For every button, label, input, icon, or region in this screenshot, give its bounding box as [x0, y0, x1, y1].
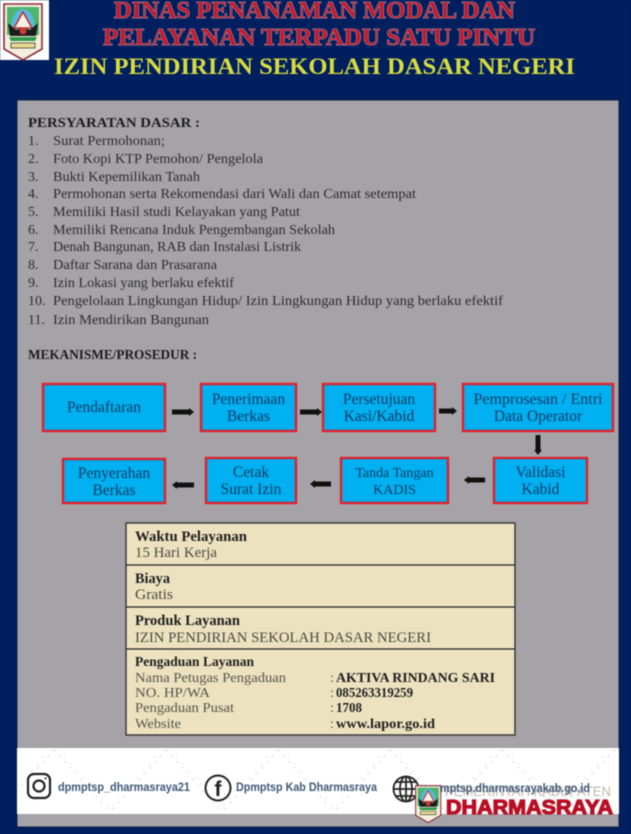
row: pengaduan layanan: Nama Petugas Pengaduan — [135, 671, 286, 686]
row: pengaduan layanan: AKTIVA RINDANG SARI — [336, 670, 495, 685]
row: pengaduan layanan: : — [330, 701, 334, 716]
row: produk layanan: IZIN PENDIRIAN SEKOLAH DASAR NEGERI — [135, 630, 431, 646]
flowchart — [43, 384, 613, 503]
step: tanda tangan: KADIS — [373, 483, 416, 498]
heading: persyaratan dasar: PERSYARATAN DASAR : — [28, 116, 200, 131]
step: tanda tangan: Tanda Tangan — [355, 466, 434, 481]
icon: globe — [394, 776, 418, 802]
row: pengaduan layanan: Website — [135, 717, 181, 732]
requirements list: Izin Lokasi yang berlaku efektif — [53, 276, 234, 291]
row: pengaduan layanan: Pengaduan Layanan — [135, 654, 254, 669]
icon: facebook: f — [214, 778, 222, 801]
row: pengaduan layanan — [135, 654, 495, 732]
requirements list: Pengelolaan Lingkungan Hidup/ Izin Lingkungan Hidup yang berlaku efektif — [53, 294, 503, 309]
info table — [126, 523, 515, 735]
footer band — [17, 748, 619, 823]
title — [54, 0, 575, 79]
step: penerimaan berkas: Berkas — [227, 408, 270, 425]
requirements list: Bukti Kepemilikan Tanah — [53, 170, 200, 185]
arrow — [439, 407, 457, 415]
requirements list: 3. — [28, 170, 38, 185]
step: penyerahan berkas — [63, 459, 165, 503]
step: validasi — [494, 458, 587, 503]
step: pendaftaran: Pendaftaran — [67, 399, 141, 416]
step: pemprosesan: Data Operator — [494, 408, 583, 425]
row: waktu pelayanan — [135, 529, 248, 561]
arrow — [300, 408, 322, 416]
requirements list: 10. — [28, 294, 46, 309]
title: IZIN PENDIRIAN SEKOLAH DASAR NEGERI — [54, 54, 575, 79]
row: waktu pelayanan: Waktu Pelayanan — [135, 529, 248, 545]
requirements list: 5. — [28, 205, 38, 220]
requirements list: 4. — [28, 187, 38, 202]
requirements list: Surat Permohonan; — [53, 134, 165, 149]
step: persetujuan — [323, 384, 435, 431]
step: penerimaan berkas — [201, 384, 296, 431]
row: pengaduan layanan: 1708 — [336, 700, 362, 715]
step: validasi: Validasi — [516, 464, 566, 481]
arrow — [172, 408, 194, 416]
requirements list: 9. — [28, 276, 38, 291]
step: pemprosesan: Pemprosesan / Entri — [474, 391, 603, 408]
requirements list: Foto Kopi KTP Pemohon/ Pengelola — [53, 152, 264, 167]
step: validasi: Kabid — [522, 481, 560, 498]
requirements list: Daftar Sarana dan Prasarana — [53, 258, 218, 273]
requirements list: 8. — [28, 258, 38, 273]
row: waktu pelayanan: 15 Hari Kerja — [135, 545, 217, 561]
dharmasraya wordmark: DHARMASRAYA — [446, 796, 613, 819]
arrow — [172, 481, 194, 489]
row: biaya: Gratis — [135, 587, 173, 603]
title: PELAYANAN TERPADU SATU PINTU — [103, 25, 535, 51]
row: pengaduan layanan: NO. HP/WA — [135, 686, 211, 701]
step: tanda tangan — [341, 458, 448, 503]
logo: regency crest — [0, 0, 49, 60]
requirements list: Permohonan serta Rekomendasi dari Wali dan Camat setempat — [53, 187, 416, 202]
requirements list: 11. — [28, 313, 45, 328]
government wordmark: PEMERINTAH KABUPATEN — [445, 784, 611, 799]
row: pengaduan layanan: : — [330, 717, 334, 732]
row: produk layanan — [135, 613, 431, 646]
instagram handle: dpmptsp_dharmasraya21 — [58, 780, 190, 794]
icon: facebook — [206, 776, 230, 801]
step: cetak surat izin: Cetak — [233, 464, 269, 481]
requirements list: 6. — [28, 223, 38, 238]
arrow — [464, 476, 485, 484]
row: pengaduan layanan: www.lapor.go.id — [336, 716, 436, 731]
heading: mekanisme prosedur: MEKANISME/PROSEDUR : — [28, 348, 197, 363]
requirements list: 7. — [28, 240, 38, 255]
step: persetujuan: Persetujuan — [343, 391, 415, 408]
requirements list: Izin Mendirikan Bangunan — [53, 313, 209, 328]
requirements list: Memiliki Hasil studi Kelayakan yang Patut — [53, 205, 300, 220]
row: pengaduan layanan: : — [330, 686, 334, 701]
requirements list: 1. — [28, 134, 38, 149]
requirements list: Denah Bangunan, RAB dan Instalasi Listrik — [53, 240, 301, 255]
step: persetujuan: Kasi/Kabid — [344, 408, 415, 425]
step: pendaftaran — [43, 384, 165, 431]
requirements list: 2. — [28, 152, 38, 167]
arrow — [310, 480, 331, 488]
step: penyerahan berkas: Berkas — [92, 482, 136, 499]
website address: mptsp.dharmasrayakab.go.id — [440, 781, 590, 795]
arrow — [534, 435, 542, 455]
facebook page: Dpmptsp Kab Dharmasraya — [236, 780, 377, 794]
requirements list — [28, 134, 503, 328]
step: pemprosesan — [463, 384, 613, 431]
step: penerimaan berkas: Penerimaan — [212, 391, 285, 408]
row: produk layanan: Produk Layanan — [135, 613, 241, 629]
row: pengaduan layanan: Pengaduan Pusat — [135, 701, 234, 716]
requirements list: Memiliki Rencana Induk Pengembangan Sekolah — [53, 223, 335, 238]
row: biaya — [135, 571, 173, 603]
logo: small crest — [416, 786, 441, 823]
step: cetak surat izin — [206, 458, 296, 503]
row: biaya: Biaya — [135, 571, 170, 587]
icon: instagram — [28, 774, 50, 798]
row: pengaduan layanan: 085263319259 — [336, 685, 413, 700]
row: pengaduan layanan: : — [330, 671, 334, 686]
step: penyerahan berkas: Penyerahan — [78, 465, 150, 482]
step: cetak surat izin: Surat Izin — [221, 481, 282, 498]
